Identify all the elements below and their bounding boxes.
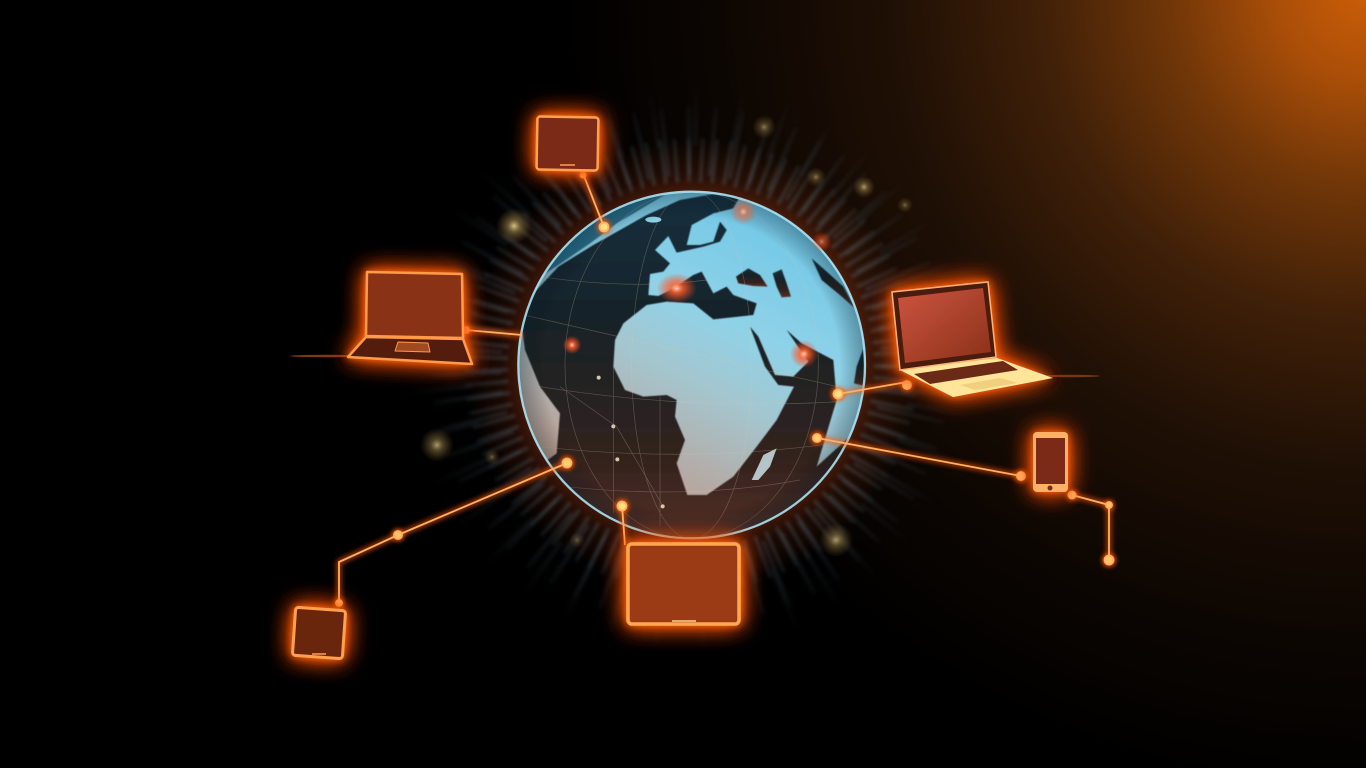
icon: bottom tablet xyxy=(628,544,739,624)
connector lines and nodes xyxy=(336,171,1114,606)
connector: phone xyxy=(813,434,1025,480)
globe: shading and rim xyxy=(518,191,866,539)
globe: graticule xyxy=(517,191,867,539)
warm rim glow around globe xyxy=(466,140,916,590)
illustration: globe connected to glowing devices xyxy=(270,0,1366,692)
globe: lake and Madagascar highlights xyxy=(645,217,777,480)
connector: top tablet xyxy=(580,171,608,232)
globe: teal cap at upper left xyxy=(546,195,666,274)
globe xyxy=(500,190,867,547)
connector: bottom tablet xyxy=(618,502,626,545)
icon: right laptop xyxy=(892,282,1053,397)
connector: left laptop xyxy=(463,327,522,335)
icon: phone xyxy=(1033,432,1068,492)
radial data rays behind globe xyxy=(436,110,946,620)
connector: phone to end node xyxy=(1068,492,1114,564)
globe: dark continents xyxy=(500,194,867,547)
globe: land base xyxy=(518,191,866,539)
glowing data orbs xyxy=(420,115,913,557)
icon: left laptop xyxy=(348,272,472,364)
connector: right laptop xyxy=(834,381,911,398)
icon: top tablet xyxy=(537,116,598,171)
globe: hot spots xyxy=(563,198,832,508)
lens flares xyxy=(290,355,1100,377)
connector: lower-left tablet xyxy=(336,458,572,606)
icon: lower-left tablet xyxy=(292,607,346,659)
